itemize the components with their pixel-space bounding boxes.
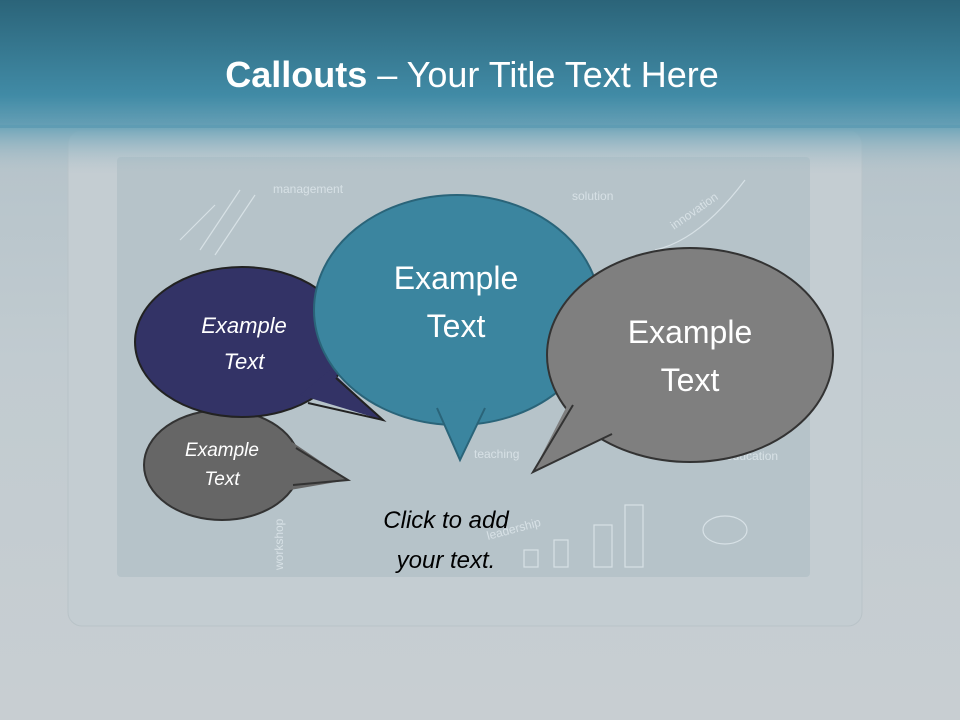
sketch doodles: education: [726, 449, 778, 463]
header bar: [0, 0, 960, 128]
sketch doodles: solution: [572, 189, 613, 203]
callout: small grey: Example: [185, 440, 259, 461]
body text: your text.: [395, 547, 495, 574]
callout: large grey: Text: [661, 362, 719, 398]
callout: teal: [314, 195, 600, 460]
callout: small grey: [144, 410, 348, 520]
sketch doodles: management: [273, 182, 344, 196]
sketch doodles: innovation: [668, 190, 721, 232]
sketch doodles: teaching: [474, 447, 519, 461]
callout: large grey: [533, 248, 833, 472]
callout: large grey: Example: [628, 314, 752, 350]
callout: teal: Example: [394, 260, 518, 296]
body text: [383, 507, 509, 574]
sketch doodles: [180, 180, 778, 571]
callout: small grey: Text: [204, 469, 240, 490]
title: Callouts – Your Title Text Here: [225, 54, 719, 95]
sketch doodles: workshop: [272, 518, 286, 571]
callout: navy: Text: [224, 349, 265, 374]
callout: navy: Example: [201, 313, 287, 338]
tablet screen: [117, 157, 810, 577]
callout: navy: [135, 267, 383, 420]
tablet frame: [68, 130, 862, 626]
body text: Click to add: [383, 507, 509, 534]
sketch doodles: leadership: [485, 515, 543, 543]
callout: teal: Text: [427, 308, 485, 344]
